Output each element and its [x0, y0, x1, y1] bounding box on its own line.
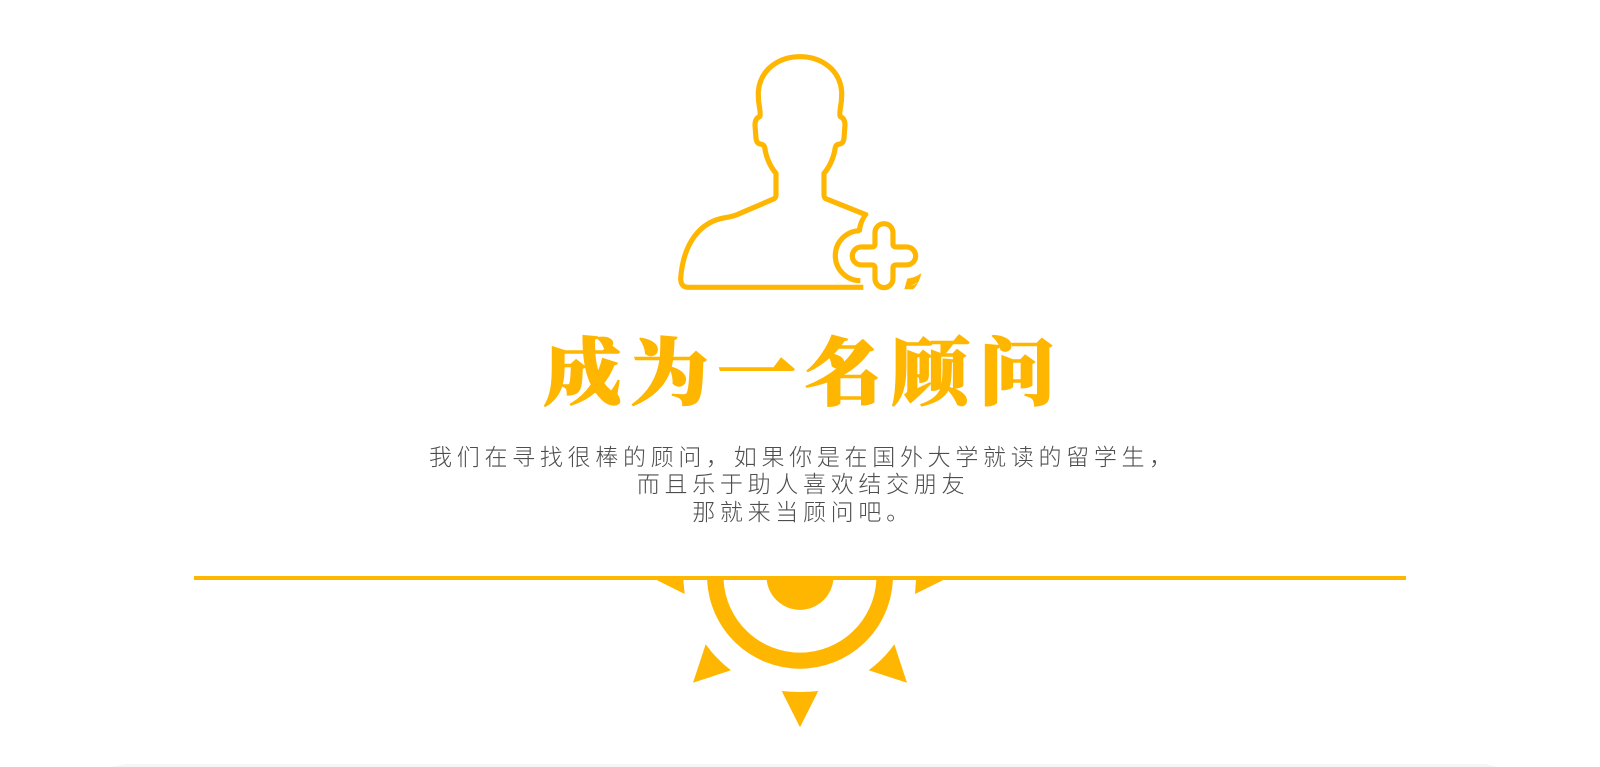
plus badge arc — [835, 231, 860, 281]
icon: person with plus — [681, 57, 921, 289]
sun core — [767, 580, 833, 610]
sun ray: lower left — [693, 644, 731, 683]
text block: description: 那就来当顾问吧。 — [692, 499, 914, 525]
title: 成为一名顾问 — [543, 333, 1066, 414]
sun ray: upper left — [657, 580, 685, 594]
sun ray: bottom — [782, 691, 818, 727]
badge arc fragment — [904, 273, 921, 289]
text block: description — [429, 444, 1177, 525]
plus sign — [852, 224, 916, 288]
text block: description: 而且乐于助人喜欢结交朋友 — [637, 471, 969, 497]
person outline — [681, 57, 867, 287]
sun ring — [707, 580, 893, 669]
text block: description: 我们在寻找很棒的顾问，如果你是在国外大学就读的留学生， — [429, 444, 1177, 470]
sun ray: lower right — [869, 644, 907, 683]
bottom shadow strip — [111, 764, 1498, 767]
divider line — [194, 576, 1406, 580]
icon: half sun — [111, 580, 1498, 767]
shoulder notch — [857, 214, 869, 233]
sun ray: upper right — [915, 580, 943, 594]
